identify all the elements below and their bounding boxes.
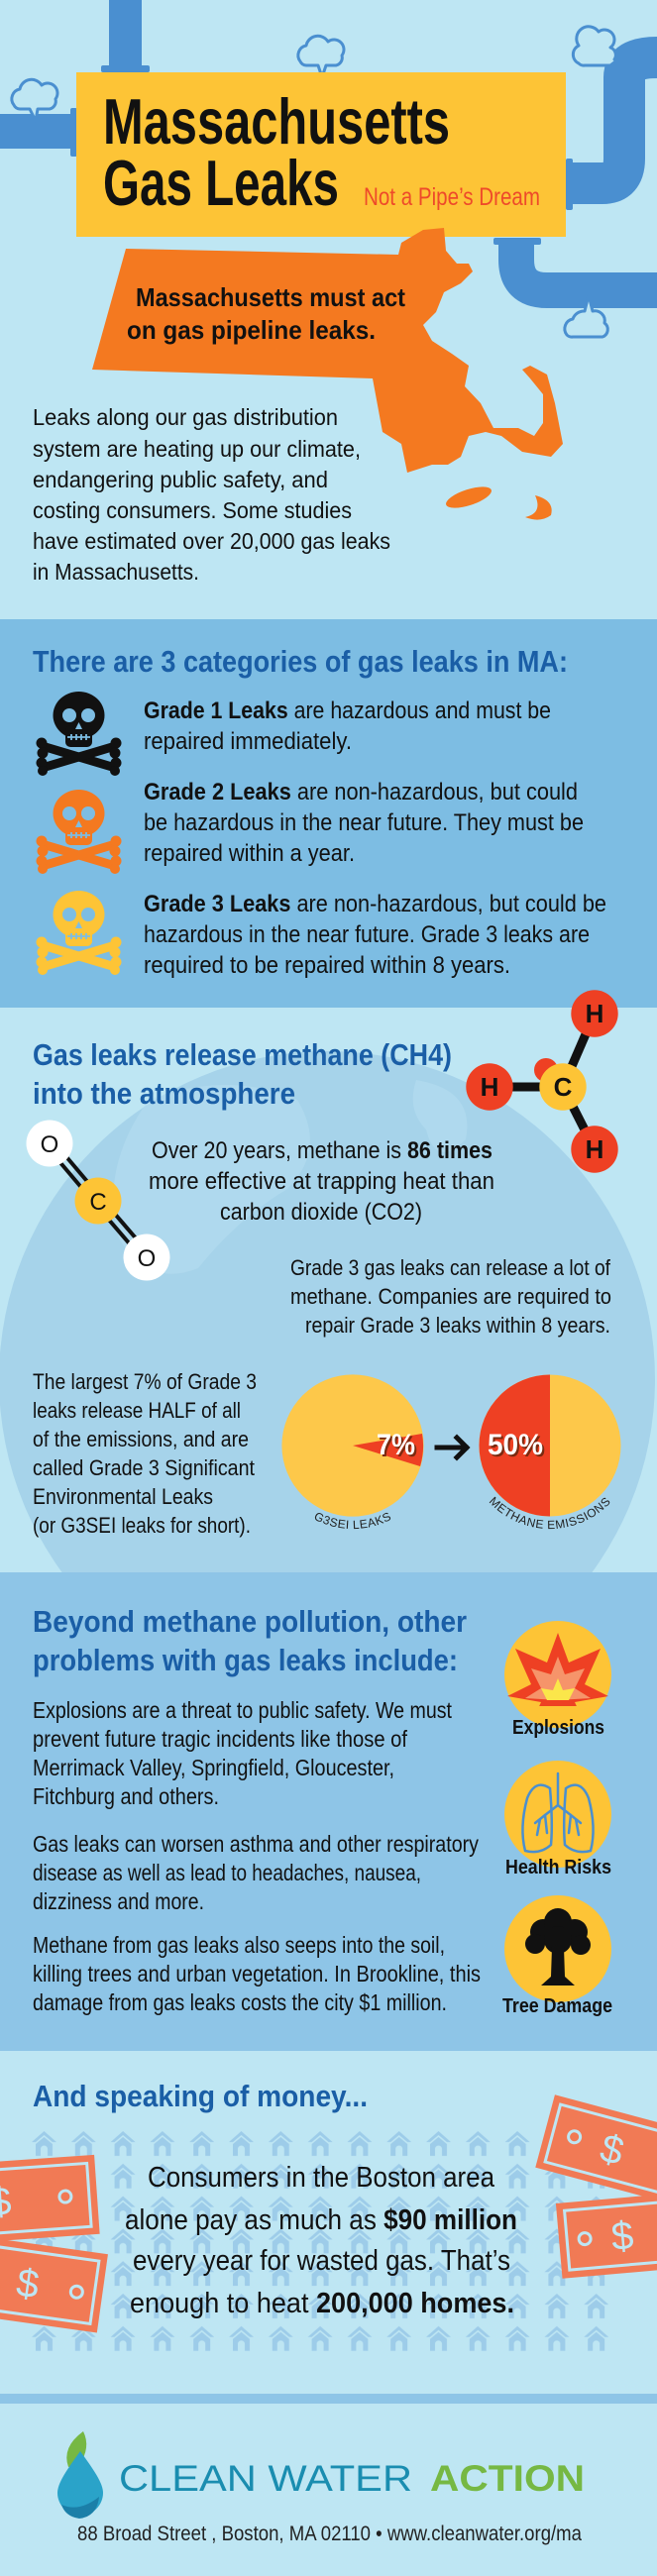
map of Massachusetts with banner text <box>92 228 563 520</box>
intro text: system are heating up our climate, <box>33 436 361 462</box>
text: grade 1: repaired immediately. <box>144 728 352 755</box>
icon: money bills right <box>535 2094 657 2279</box>
icon: health risks (lungs): Health Risks <box>505 1857 611 1878</box>
text: money: enough to heat 200,000 homes. <box>130 2288 514 2319</box>
map of Massachusetts with banner text: on gas pipeline leaks. <box>127 315 376 345</box>
icon: CH4 molecule: H <box>586 1134 603 1164</box>
text: largest 7%: Environmental Leaks <box>33 1484 213 1509</box>
text: grade 2: repaired within a year. <box>144 840 355 867</box>
text: explosions: Fitchburg and others. <box>33 1783 219 1809</box>
globe background <box>0 1051 655 1572</box>
text: health: disease as well as lead to headaches, nausea, <box>33 1860 421 1885</box>
icon: CO2 molecule: O <box>41 1131 58 1158</box>
icon: CO2 molecule <box>26 1120 170 1280</box>
text: grade 1: Grade 1 Leaks are hazardous and must be <box>144 698 551 724</box>
text: grade 3 release: Grade 3 gas leaks can release a lot of <box>290 1255 611 1280</box>
title box: Massachusetts <box>103 85 450 158</box>
heading: 3 categories: There are 3 categories of gas leaks in MA: <box>33 644 568 679</box>
icon: CH4 molecule: C <box>554 1072 573 1102</box>
text: largest 7% <box>33 1369 257 1538</box>
icon: orange skull <box>36 790 121 874</box>
intro text: Leaks along our gas distribution <box>33 404 338 430</box>
text: money: alone pay as much as $90 million <box>125 2204 517 2236</box>
map of Massachusetts with banner text: Massachusetts must act <box>136 282 405 312</box>
text: largest 7%: (or G3SEI leaks for short). <box>33 1513 251 1538</box>
chart: methane emissions pie: METHANE EMISSIONS <box>490 1496 610 1530</box>
icon: CO2 molecule: C <box>89 1189 107 1216</box>
text: grade 3: required to be repaired within 8 years. <box>144 952 510 979</box>
text: 86 times <box>149 1137 494 1226</box>
intro text: endangering public safety, and <box>33 467 328 492</box>
text: grade 2 <box>144 779 584 867</box>
icon: money bills left: $ <box>14 2261 42 2308</box>
text: money <box>125 2162 517 2319</box>
icon: leak clouds <box>12 27 618 337</box>
chart: G3SEI leaks pie: 7% <box>377 1429 415 1461</box>
icon: money bills right: $ <box>596 2126 628 2174</box>
icon: tree damage: Tree Damage <box>502 1995 612 2017</box>
heading: other problems: problems with gas leaks include: <box>33 1643 458 1677</box>
text: trees: Methane from gas leaks also seeps into the soil, <box>33 1932 445 1958</box>
footer address: 88 Broad Street , Boston, MA 02110 • www.cleanwater.org/ma <box>77 2522 582 2545</box>
text: grade 3: Grade 3 Leaks are non-hazardous, but could be <box>144 891 606 917</box>
heading: methane: Gas leaks release methane (CH4) <box>33 1037 452 1072</box>
text: grade 3 release: methane. Companies are required to <box>290 1284 611 1309</box>
text: 86 times: more effective at trapping heat than <box>149 1168 494 1195</box>
icon: tree damage <box>502 1895 612 2017</box>
heading: other problems: Beyond methane pollution, other <box>33 1604 467 1639</box>
text: largest 7%: The largest 7% of Grade 3 <box>33 1369 257 1394</box>
text: grade 2: be hazardous in the near future. They must be <box>144 809 584 836</box>
icon: black skull <box>36 692 121 776</box>
text: trees: damage from gas leaks costs the city $1 million. <box>33 1989 447 2015</box>
text: health: dizziness and more. <box>33 1888 204 1914</box>
icon: health risks (lungs) <box>504 1761 611 1878</box>
intro text: in Massachusetts. <box>33 559 199 585</box>
icon: money bills right: $ <box>609 2213 635 2259</box>
text: money: Consumers in the Boston area <box>148 2162 495 2194</box>
text: grade 3 <box>144 891 606 979</box>
heading: other problems <box>33 1604 467 1677</box>
icon: CH4 molecule <box>466 990 618 1173</box>
heading: money: And speaking of money... <box>33 2079 368 2113</box>
chart: methane emissions pie: 50% <box>490 1431 545 1463</box>
subtitle: Not a Pipe’s Dream <box>364 183 540 211</box>
text: explosions: Merrimack Valley, Springfield, Gloucester, <box>33 1755 394 1780</box>
title box: Gas Leaks <box>103 147 339 219</box>
text: largest 7%: called Grade 3 Significant <box>33 1455 255 1480</box>
icon: CO2 molecule: O <box>138 1245 156 1272</box>
text: largest 7%: leaks release HALF of all <box>33 1398 241 1423</box>
text: grade 3 release <box>290 1255 611 1338</box>
chart: methane emissions pie: 50% <box>488 1429 543 1461</box>
icon: explosions: Explosions <box>512 1717 604 1739</box>
text: 86 times: Over 20 years, methane is 86 times <box>152 1137 493 1164</box>
icon: yellow skull <box>36 891 121 975</box>
title box <box>76 72 566 237</box>
text: health <box>33 1831 479 1914</box>
intro text <box>33 404 390 585</box>
text: 86 times: carbon dioxide (CO2) <box>220 1199 422 1226</box>
text: grade 2: Grade 2 Leaks are non-hazardous, but could <box>144 779 578 805</box>
text: explosions: prevent future tragic incidents like those of <box>33 1726 408 1752</box>
heading: methane: into the atmosphere <box>33 1076 295 1111</box>
text: money: every year for wasted gas. That’s <box>133 2245 510 2277</box>
text: grade 3: hazardous in the near future. Grade 3 leaks are <box>144 921 590 948</box>
text: trees <box>33 1932 481 2015</box>
chart: G3SEI leaks pie <box>281 1374 424 1530</box>
pipes <box>0 0 657 290</box>
chart: G3SEI leaks pie: 7% <box>379 1431 417 1463</box>
text: grade 3 release: repair Grade 3 leaks within 8 years. <box>305 1313 610 1338</box>
intro text: costing consumers. Some studies <box>33 497 352 523</box>
text: explosions: Explosions are a threat to public safety. We must <box>33 1697 453 1723</box>
text: health: Gas leaks can worsen asthma and other respiratory <box>33 1831 479 1857</box>
icon: CH4 molecule: H <box>481 1072 498 1102</box>
logo: clean water action <box>57 2431 585 2519</box>
chart: methane emissions pie <box>480 1375 620 1530</box>
icon: explosions <box>504 1621 611 1739</box>
icon: CH4 molecule: H <box>586 999 603 1028</box>
houses pattern <box>31 2129 622 2357</box>
logo: clean water action: CLEAN WATER <box>119 2458 412 2499</box>
logo: clean water action: ACTION <box>430 2458 585 2499</box>
heading: methane <box>33 1037 452 1111</box>
icon: money bills left <box>0 2155 108 2333</box>
arrow <box>437 1438 467 1457</box>
text: explosions <box>33 1697 453 1809</box>
intro text: have estimated over 20,000 gas leaks <box>33 528 390 554</box>
text: trees: killing trees and urban vegetation. In Brookline, this <box>33 1961 481 1986</box>
text: largest 7%: of the emissions, and are <box>33 1427 249 1451</box>
text: grade 1 <box>144 698 551 755</box>
chart: G3SEI leaks pie: G3SEI LEAKS <box>315 1512 390 1530</box>
